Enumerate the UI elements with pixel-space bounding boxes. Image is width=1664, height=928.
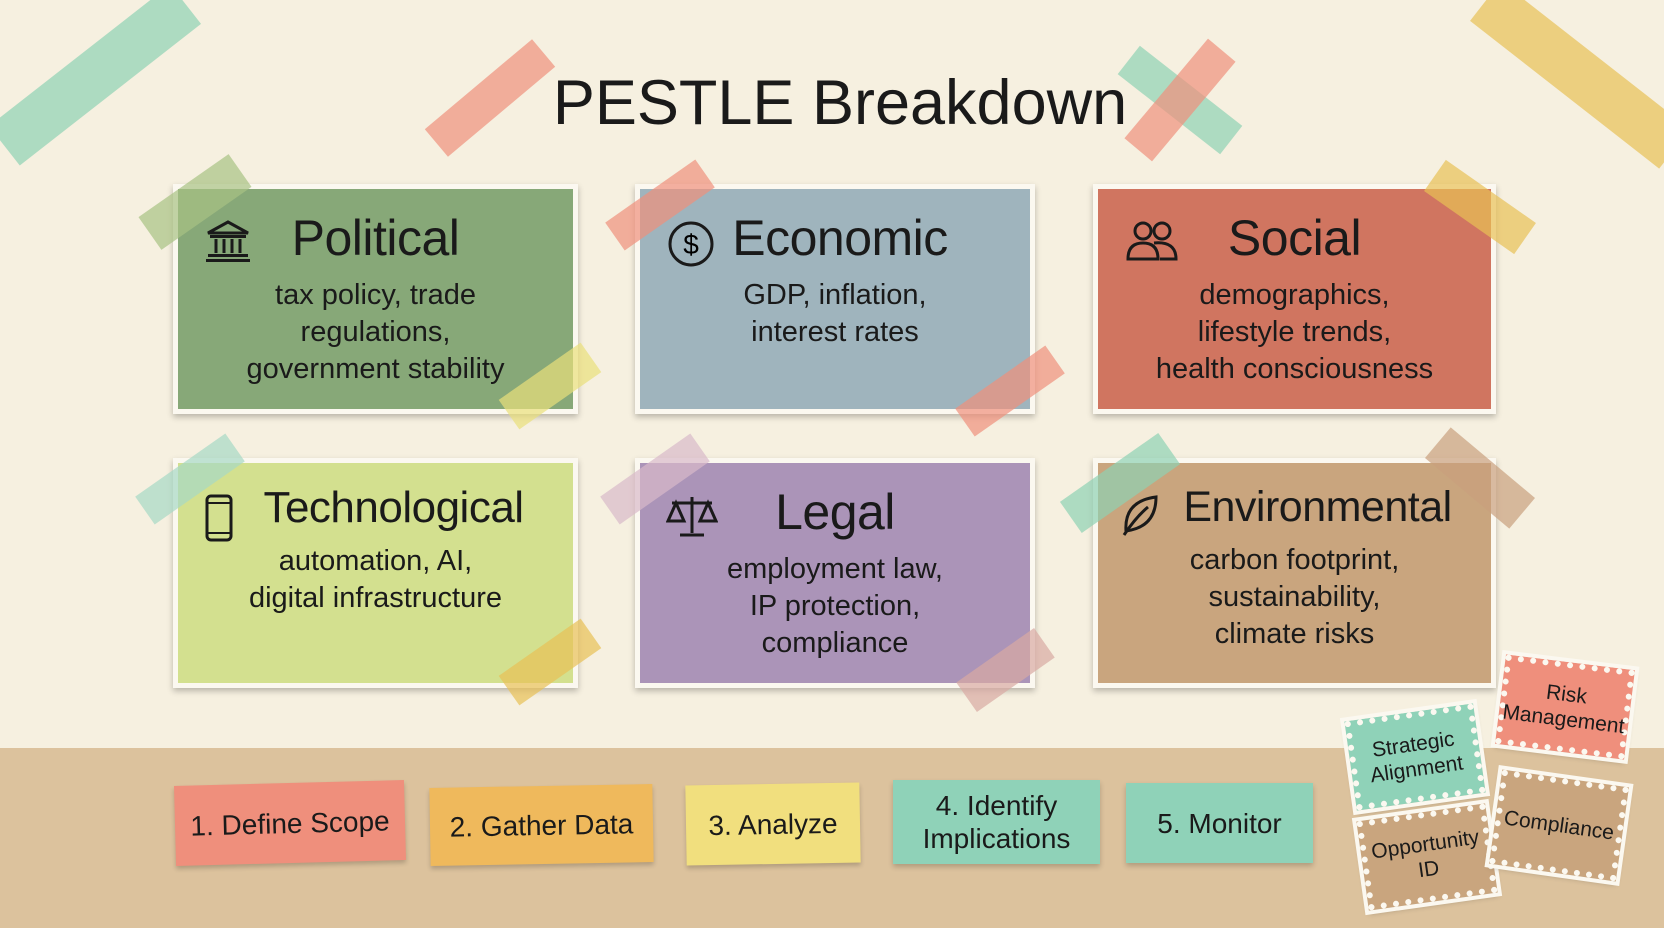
step 1	[174, 780, 406, 866]
panel: social	[1093, 184, 1496, 414]
text	[727, 553, 943, 659]
heading: Legal	[775, 484, 895, 540]
heading: Social	[1228, 210, 1361, 266]
text: climate risks	[1215, 618, 1374, 650]
stamp: strategic alignment: Strategic	[1371, 727, 1456, 762]
icon: dollar: $	[683, 229, 699, 260]
stamp: opportunity id: Opportunity	[1370, 826, 1481, 864]
text	[1156, 279, 1433, 385]
kraft paper band	[0, 748, 1664, 928]
text: health consciousness	[1156, 353, 1433, 385]
heading: Environmental	[1183, 483, 1452, 531]
tape: top left	[0, 0, 201, 166]
card tapes	[138, 154, 252, 250]
step 5: 5. Monitor	[1157, 808, 1282, 838]
stamp: risk management: Management	[1501, 701, 1626, 738]
step 4: 4. Identify	[936, 790, 1057, 821]
step 1: 1. Define Scope	[190, 805, 390, 841]
panel: economic	[635, 184, 1035, 414]
text	[743, 279, 927, 348]
stamp: compliance	[1489, 770, 1629, 881]
text: lifestyle trends,	[1198, 316, 1391, 348]
step 4	[893, 780, 1100, 864]
text: government stability	[247, 353, 504, 385]
stamp: compliance: Compliance	[1502, 806, 1615, 845]
stamp: strategic alignment	[1344, 703, 1486, 811]
heading: Economic	[732, 210, 948, 266]
text	[1190, 544, 1399, 650]
icon: phone	[206, 494, 232, 542]
heading: Technological	[263, 483, 524, 532]
panel: environmental	[1093, 458, 1496, 688]
text: tax policy, trade	[275, 279, 476, 311]
text: regulations,	[301, 316, 450, 348]
icon: dollar	[668, 222, 714, 266]
step 4: Implications	[923, 823, 1070, 854]
icon: leaf	[1122, 495, 1158, 536]
text: automation, AI,	[279, 545, 472, 577]
stamp: opportunity id	[1356, 803, 1498, 911]
text	[247, 279, 504, 385]
stamp: risk management	[1495, 654, 1635, 760]
icon: scales	[666, 497, 718, 536]
icon: people	[1126, 222, 1178, 260]
step 2	[429, 784, 654, 866]
step 2: 2. Gather Data	[449, 808, 634, 842]
text	[249, 545, 502, 614]
text: IP protection,	[750, 590, 920, 622]
text: interest rates	[751, 316, 919, 348]
text: GDP, inflation,	[743, 279, 927, 311]
text: digital infrastructure	[249, 582, 502, 614]
tape: title right cross	[1118, 46, 1242, 154]
text: employment law,	[727, 553, 943, 585]
panel: legal	[635, 458, 1035, 688]
step 3	[685, 782, 861, 866]
step 3: 3. Analyze	[708, 807, 838, 841]
heading: Political	[292, 210, 459, 266]
text: demographics,	[1199, 279, 1390, 311]
text: compliance	[762, 627, 908, 659]
title: PESTLE Breakdown	[553, 68, 1127, 138]
panel: political	[173, 184, 578, 414]
tape: title left	[425, 39, 555, 157]
stamp: risk management: Risk	[1545, 681, 1588, 708]
tape: top right	[1470, 0, 1664, 169]
icon: building	[206, 220, 250, 262]
text: carbon footprint,	[1190, 544, 1399, 576]
step 5	[1126, 783, 1313, 863]
stamp: strategic alignment: Alignment	[1369, 751, 1465, 787]
panel: technological	[173, 458, 578, 688]
stamp: opportunity id: ID	[1417, 857, 1441, 882]
text: sustainability,	[1209, 581, 1380, 613]
